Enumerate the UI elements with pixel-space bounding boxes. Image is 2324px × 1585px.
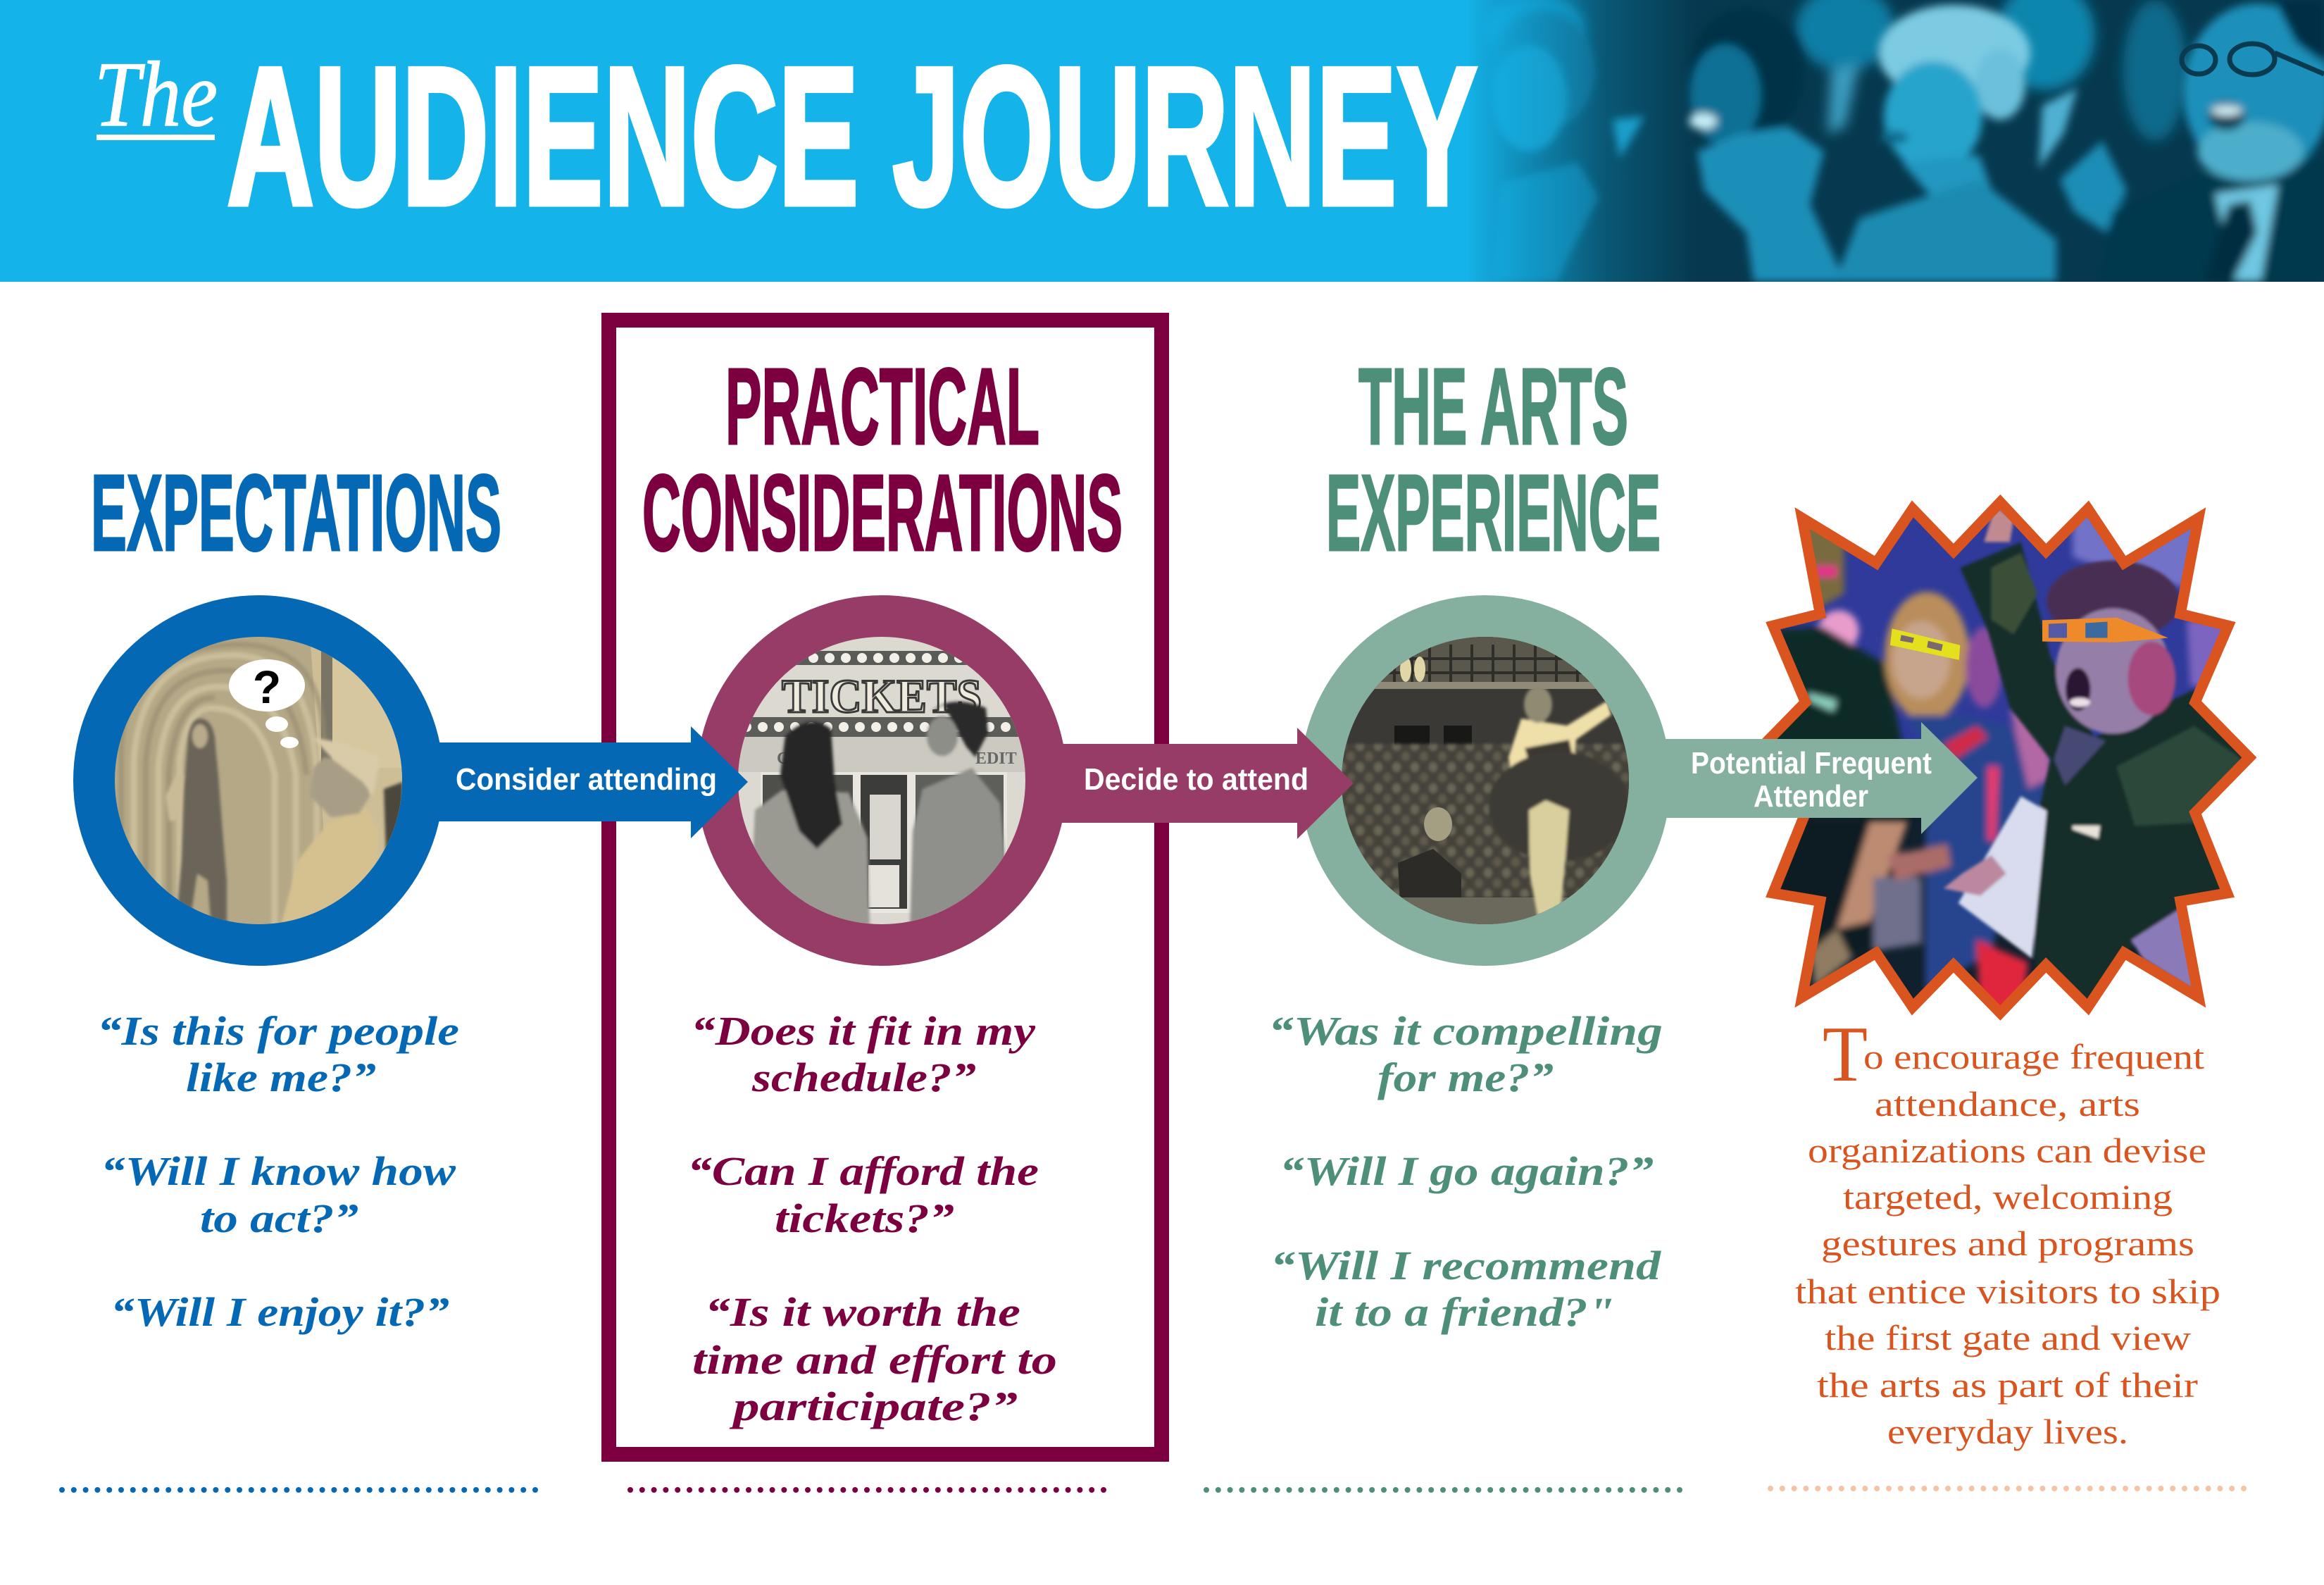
dancer <box>1489 686 1630 923</box>
circle: practical considerations photo: CA <box>777 750 801 768</box>
suited man in back <box>2039 88 2078 169</box>
panel: practical considerations frame <box>608 320 1162 1454</box>
stage floor <box>1401 897 1568 924</box>
header banner <box>0 0 2324 282</box>
quotes: practical considerations: “Is it worth the <box>705 1289 1020 1335</box>
wall pattern <box>134 655 317 930</box>
arrow: decide to attend <box>1039 728 1354 839</box>
heading: the arts experience: THE ARTS <box>1358 346 1628 467</box>
text: EXPECTATIONS <box>91 452 501 573</box>
quotes: arts experience: “Was it compelling <box>1268 1008 1663 1054</box>
arrow: potential frequent attender: Attender <box>1754 779 1868 814</box>
text block: frequent attendance: attendance, arts <box>1875 1084 2140 1124</box>
sign: tickets: TICKETS <box>782 669 982 723</box>
man's glasses <box>2182 44 2324 75</box>
text block: frequent attendance: organizations can devise <box>1808 1131 2206 1170</box>
quotes: expectations <box>97 1008 459 1335</box>
woman figure <box>165 719 227 930</box>
title <box>94 27 1478 247</box>
woman on far left <box>1503 10 1597 124</box>
quotes: expectations: “Will I know how <box>101 1148 456 1194</box>
text: CONSIDERATIONS <box>642 452 1123 573</box>
text block: frequent attendance: everyday lives. <box>1887 1412 2128 1451</box>
laughing man <box>2099 155 2324 282</box>
title word: The: The <box>94 42 218 146</box>
circle: arts experience photo <box>1300 595 1670 966</box>
quotes: practical considerations: “Does it fit in my <box>691 1008 1035 1054</box>
text block: frequent attendance: the first gate and view <box>1825 1318 2191 1357</box>
quotes: practical considerations: tickets?” <box>775 1195 954 1241</box>
quotes: practical considerations: participate?” <box>729 1384 1018 1429</box>
text block: frequent attendance: the arts as part of their <box>1817 1365 2198 1405</box>
quotes: practical considerations: time and effort to <box>692 1337 1057 1383</box>
quotes: practical considerations <box>687 1008 1057 1429</box>
arrow: consider attending <box>416 726 748 838</box>
quotes: arts experience: it to a friend?" <box>1315 1289 1615 1335</box>
quotes: practical considerations: “Can I afford the <box>687 1148 1039 1194</box>
icon: thought bubble <box>229 659 305 748</box>
heading: the arts experience <box>1326 346 1661 573</box>
arrow: consider attending: Consider attending <box>456 762 717 797</box>
heading: practical considerations <box>642 346 1123 573</box>
man in centre <box>1689 7 1804 141</box>
text block: frequent attendance: targeted, welcoming <box>1843 1177 2173 1217</box>
arrow: potential frequent attender: Potential Frequent <box>1691 746 1932 781</box>
heading: practical considerations: PRACTICAL <box>725 346 1039 467</box>
quotes: arts experience: “Will I recommend <box>1270 1243 1661 1288</box>
header audience photo <box>1465 0 2324 282</box>
quotes: arts experience: for me?” <box>1377 1055 1554 1100</box>
quotes: expectations: “Will I enjoy it?” <box>111 1289 449 1335</box>
quotes: practical considerations: schedule?” <box>751 1055 976 1100</box>
icon: thought bubble: ? <box>253 661 281 713</box>
circle: practical considerations photo <box>696 595 1067 966</box>
quotes: arts experience <box>1268 1008 1663 1335</box>
quotes: arts experience: “Will I go again?” <box>1280 1148 1654 1194</box>
older woman <box>1878 5 2030 101</box>
quotes: expectations: to act?” <box>200 1195 358 1241</box>
text block: frequent attendance: gestures and programs <box>1821 1224 2194 1263</box>
arrow: potential frequent attender <box>1641 722 1978 834</box>
crowd <box>1338 744 1634 897</box>
text block: frequent attendance: o encourage frequent <box>1863 1037 2204 1076</box>
text block: frequent attendance <box>1795 1011 2220 1451</box>
text: EXPERIENCE <box>1326 452 1661 573</box>
two women at the booth <box>752 702 1006 930</box>
quotes: expectations: “Is this for people <box>97 1008 459 1054</box>
text block: frequent attendance: that entice visitors to skip <box>1795 1272 2220 1311</box>
clapping hands <box>1697 127 1845 282</box>
title words: Audience Journey: AUDIENCE JOURNEY <box>227 27 1478 247</box>
text block: frequent attendance: T <box>1823 1011 1868 1098</box>
circle: practical considerations photo: EDIT <box>975 750 1017 768</box>
quotes: expectations: like me?” <box>186 1055 376 1100</box>
man looking up <box>281 738 403 937</box>
orange and yellow 3D glasses <box>2042 618 2168 642</box>
photo: starburst <box>1762 495 2256 1021</box>
circle: expectations photo <box>73 595 444 966</box>
arrow: decide to attend: Decide to attend <box>1084 762 1308 797</box>
